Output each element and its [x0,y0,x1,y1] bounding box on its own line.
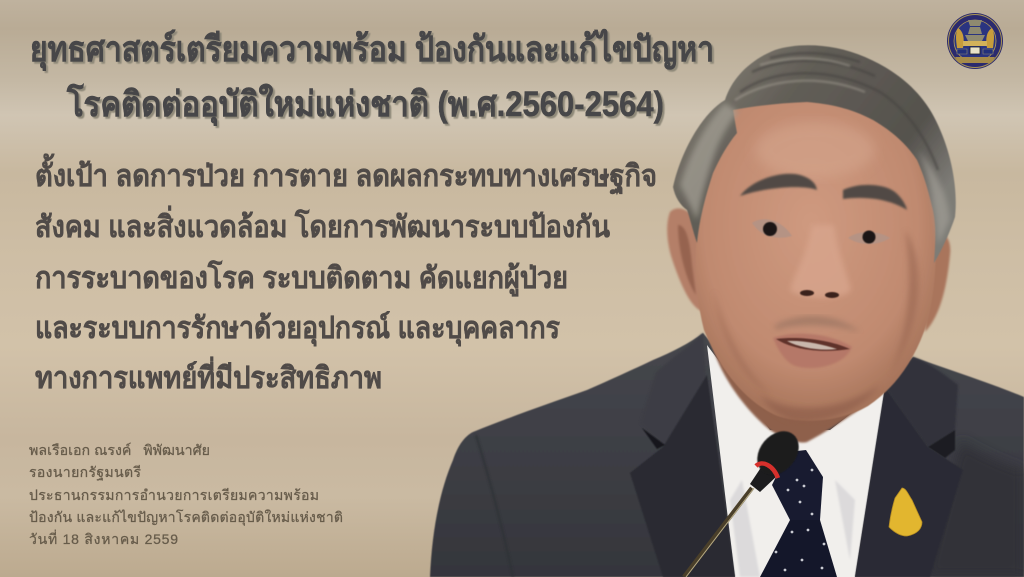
sleeve seam [476,435,513,577]
right ear [925,233,950,332]
signature block [29,442,343,547]
forehead highlight [755,122,875,178]
title line 1: ยุทธศาสตร์เตรียมความพร้อม ป้องกันและแก้ไขปัญหา [30,28,714,71]
right eyebrow [843,185,907,210]
left eye [752,219,792,238]
mic head [749,423,807,483]
signer role: รองนายกรัฐมนตรี [29,464,141,481]
left collar and lapel [630,333,735,577]
hair mass [673,45,956,263]
date: วันที่ 18 สิงหาคม 2559 [29,530,178,547]
left eyebrow [740,174,817,196]
right side grey hair [918,150,950,245]
moustache shadow [775,316,860,332]
hair [673,45,956,263]
cheek shading [714,230,919,395]
neck [712,330,890,442]
tie knot [772,450,823,520]
suit jacket [430,333,1024,577]
portrait photo of speaker [430,45,1024,577]
committee line 2: ป้องกัน และแก้ไขปัญหาโรคติดต่ออุบัติใหม่แห่งชาติ [29,509,343,526]
right collar [885,357,958,447]
left ear inner shadow [678,225,696,295]
mic collar [750,466,777,492]
body line 4: และระบบการรักษาด้วยอุปกรณ์ และบุคคลากร [35,311,560,347]
left side grey hair [680,103,738,220]
right notch [928,430,955,458]
signer name: พลเรือเอก ณรงค์ พิพัฒนาศัย [29,442,210,458]
mic stem [684,488,752,577]
mic stem highlight [686,488,754,577]
shirt shadow [730,480,855,577]
hair light streaks [735,58,865,100]
title line 2: โรคติดต่ออุบัติใหม่แห่งชาติ (พ.ศ.2560-2564) [66,83,664,126]
emblem: government seal [947,13,1003,69]
shirt [707,345,885,577]
title [30,28,714,126]
right lapel [855,387,963,577]
right eye [848,230,890,244]
body line 5: ทางการแพทย์ที่มีประสิทธิภาพ [35,356,382,395]
tie blade [760,520,837,577]
necktie [760,450,837,577]
committee line 1: ประธานกรรมการอำนวยการเตรียมความพร้อม [29,487,319,503]
left ear [667,208,706,312]
hair comb streaks [740,53,938,170]
left notch [642,428,665,449]
right collar and lapel [855,357,963,577]
mic red ring [756,463,778,478]
gold lapel badge [889,488,922,536]
left collar [640,333,708,447]
microphone [684,423,807,577]
mouth [773,334,852,368]
face [696,93,936,421]
body line 3: การระบาดของโรค ระบบติดตาม คัดแยกผู้ป่วย [35,259,568,297]
body text block [35,153,657,395]
body line 1: ตั้งเป้า ลดการป่วย การตาย ลดผลกระทบทางเศรษฐกิจ [35,153,657,196]
chin shadow [760,385,880,422]
right chest shading [925,440,1024,577]
left lapel [630,375,735,577]
body line 2: สังคม และสิ่งแวดล้อม โดยการพัฒนาระบบป้องกัน [35,205,610,244]
nose [790,225,851,298]
